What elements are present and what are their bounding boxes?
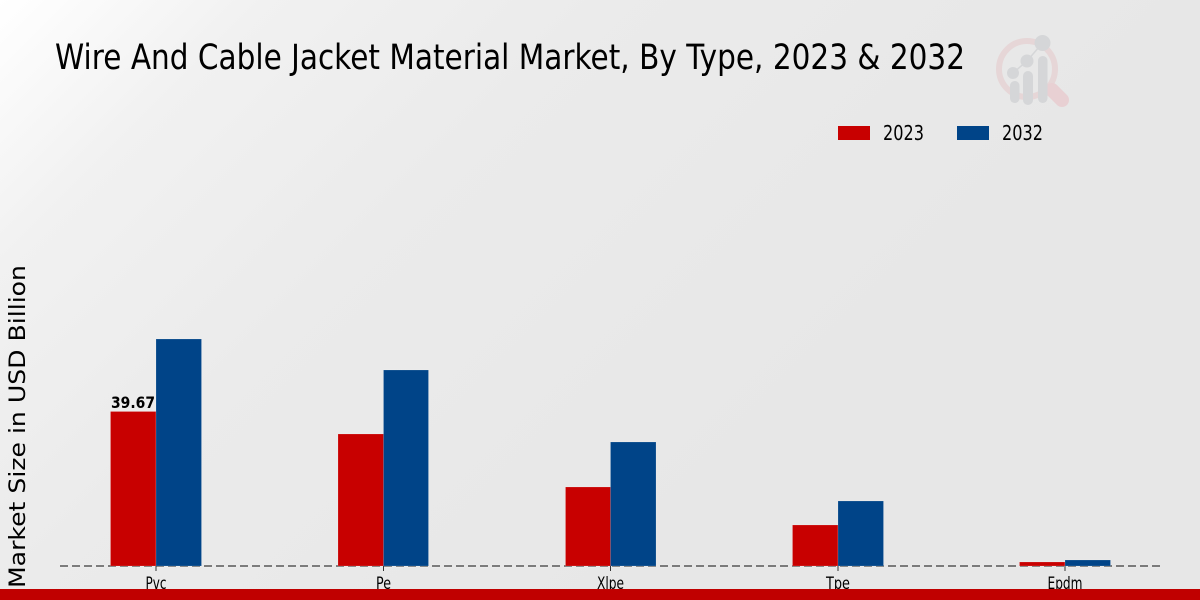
- group: Xlpe: Xlpe: [597, 574, 624, 594]
- group: Tpe: Tpe: [825, 574, 850, 594]
- group: Pvc: Pvc: [146, 574, 166, 594]
- group: Pe: Pe: [376, 574, 391, 594]
- y axis label: Market Size in USD Billion: [5, 265, 31, 588]
- title: Wire And Cable Jacket Material Market, By Type, 2023 & 2032: [55, 38, 965, 78]
- group: Xlpe: [566, 442, 656, 594]
- legend entry: 2032: [957, 121, 1043, 145]
- icon: magnifier watermark logo: [999, 35, 1062, 105]
- value label: 39.67: [111, 393, 155, 412]
- group: Pe: [338, 370, 428, 594]
- bar chart: [60, 339, 1160, 594]
- legend: [838, 121, 1043, 145]
- group: Pvc: [110, 339, 202, 594]
- axis baseline: [60, 565, 1160, 567]
- group: Epdm: [1020, 560, 1110, 594]
- footer bar: [0, 589, 1200, 600]
- legend entry: 2023: [838, 121, 924, 145]
- group: Epdm: Epdm: [1048, 574, 1082, 594]
- legend entry: 2032: 2032: [1002, 121, 1043, 145]
- group: Tpe: [792, 501, 884, 594]
- legend entry: 2023: 2023: [883, 121, 924, 145]
